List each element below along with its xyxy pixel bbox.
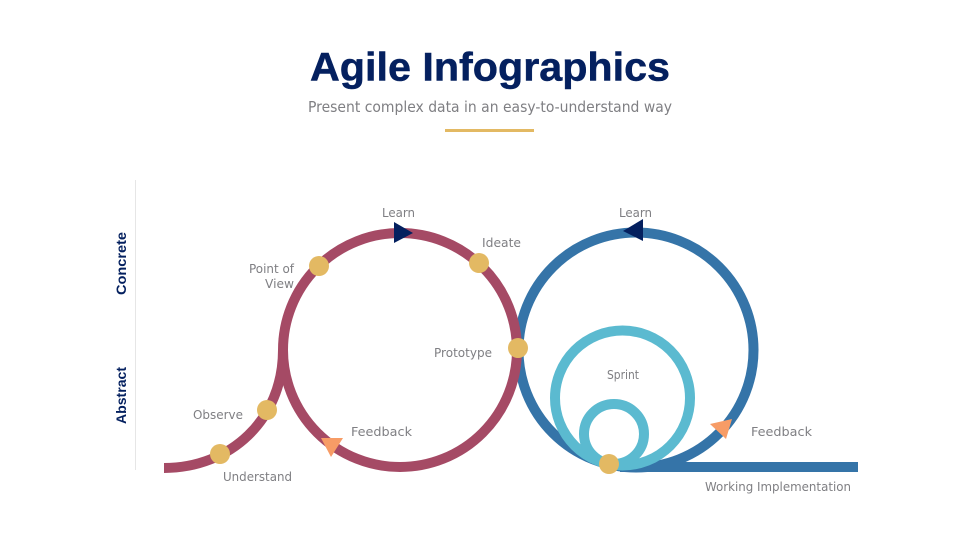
label: point of view — [249, 262, 295, 291]
milestone dots — [210, 253, 619, 474]
blue loop with working implementation line — [518, 232, 858, 468]
label: ideate: Ideate — [482, 236, 521, 250]
label: feedback left: Feedback — [351, 425, 412, 439]
subtitle: Present complex data in an easy-to-understand way — [308, 98, 672, 116]
label: point of view: Point of — [249, 262, 295, 276]
label: learn right: Learn — [619, 206, 652, 220]
arrow: red loop feedback — [321, 438, 343, 457]
sprint loops — [555, 330, 690, 466]
title: Agile Infographics — [310, 46, 670, 90]
label: point of view: View — [265, 277, 294, 291]
label: understand: Understand — [223, 470, 292, 484]
label: working implementation: Working Implementation — [705, 480, 851, 494]
title underline — [445, 129, 534, 132]
label: observe: Observe — [193, 408, 243, 422]
arrow: blue loop learn — [623, 219, 643, 241]
axis label: abstract: Abstract — [113, 367, 129, 424]
label: learn: Learn — [382, 206, 415, 220]
label: prototype: Prototype — [434, 346, 492, 360]
arrow: blue loop feedback — [710, 419, 732, 439]
arrow: red loop learn — [394, 222, 413, 243]
label: sprint: Sprint — [607, 368, 639, 382]
label: feedback right: Feedback — [751, 425, 812, 439]
axis label: concrete: Concrete — [113, 232, 129, 295]
vertical axis — [113, 180, 136, 470]
red loop with lead-in curve — [164, 233, 517, 468]
